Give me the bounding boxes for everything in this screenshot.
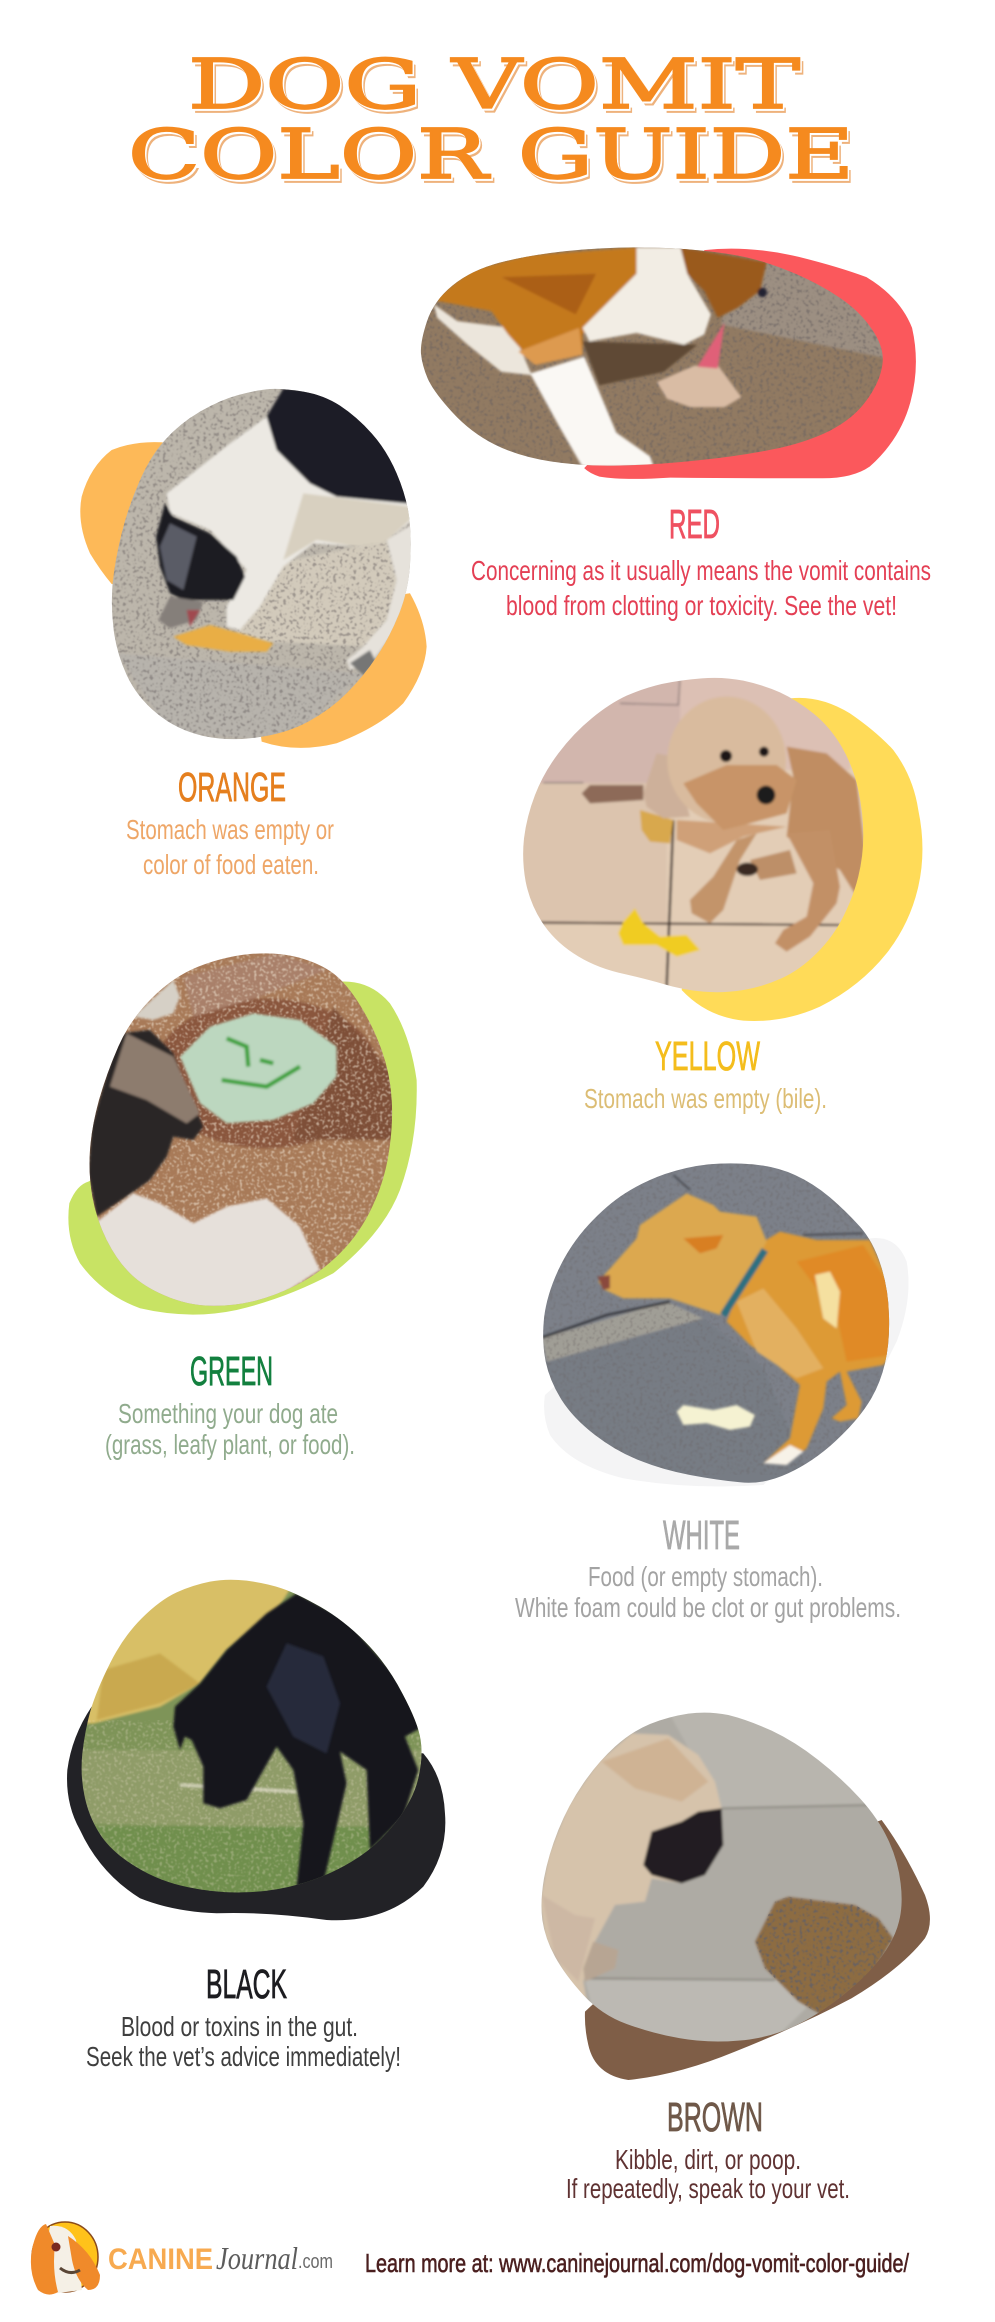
title: COLOR GUIDE — [128, 116, 854, 195]
wordmark: Canine: CANINE — [108, 2243, 213, 2276]
photo: black dog on grass — [73, 1573, 430, 1900]
heading: red: RED — [669, 501, 720, 547]
description: brown — [566, 2144, 850, 2204]
panel: brown — [535, 1705, 930, 2204]
title — [128, 46, 857, 199]
color blob: orange — [80, 442, 427, 748]
heading: brown: BROWN — [667, 2094, 763, 2140]
description: orange: color of food eaten. — [143, 849, 319, 880]
wordmark: .com: .com — [298, 2251, 333, 2273]
logo: Canine Journal — [31, 2222, 333, 2295]
photo: dog with green vomit — [83, 945, 405, 1313]
description: green: (grass, leafy plant, or food). — [105, 1429, 355, 1460]
description: brown: Kibble, dirt, or poop. — [615, 2144, 801, 2175]
photo: dog with brown vomit — [535, 1705, 908, 2048]
panel: red — [410, 240, 931, 621]
description: black: Blood or toxins in the gut. — [121, 2011, 358, 2042]
title: COLOR GUIDE — [131, 120, 857, 199]
heading: orange: ORANGE — [178, 764, 286, 810]
description: green — [105, 1398, 355, 1460]
photo: dog with white vomit — [537, 1158, 897, 1492]
title: DOG VOMIT — [190, 48, 802, 127]
color blob: red — [584, 249, 916, 479]
color blob: green — [68, 982, 417, 1315]
wordmark: Journal: Journal — [216, 2240, 298, 2276]
heading: yellow: YELLOW — [655, 1033, 760, 1079]
title: DOG VOMIT — [188, 46, 800, 125]
description: orange — [126, 814, 334, 880]
heading: white: WHITE — [663, 1512, 740, 1558]
description: black: Seek the vet’s advice immediately! — [86, 2041, 401, 2072]
description: yellow: Stomach was empty (bile). — [584, 1083, 827, 1114]
description: red — [471, 555, 931, 621]
color blob: white — [544, 1238, 909, 1486]
photo: dog with red vomit — [420, 247, 883, 466]
icon: basset hound — [31, 2222, 100, 2295]
panel: black — [67, 1573, 445, 2072]
color blob: black — [67, 1707, 445, 1920]
description: black — [86, 2011, 401, 2072]
photo: dog with yellow vomit — [517, 673, 870, 997]
heading: green: GREEN — [190, 1348, 273, 1394]
panel: orange — [80, 383, 427, 880]
description: brown: If repeatedly, speak to your vet. — [566, 2173, 850, 2204]
description: white: Food (or empty stomach). — [588, 1561, 823, 1592]
color blob: brown — [585, 1820, 930, 2080]
panel: green — [68, 945, 417, 1460]
title: COLOR GUIDE — [130, 118, 856, 197]
panel: white — [515, 1158, 909, 1623]
heading: black: BLACK — [206, 1961, 287, 2007]
photo: dog with orange vomit — [112, 388, 411, 740]
panel: yellow — [517, 673, 922, 1114]
footer — [31, 2222, 910, 2295]
description: green: Something your dog ate — [118, 1398, 338, 1429]
description: white — [515, 1561, 901, 1623]
color blob: yellow — [682, 698, 922, 1021]
title: DOG VOMIT — [191, 50, 803, 129]
description: orange: Stomach was empty or — [126, 814, 334, 845]
